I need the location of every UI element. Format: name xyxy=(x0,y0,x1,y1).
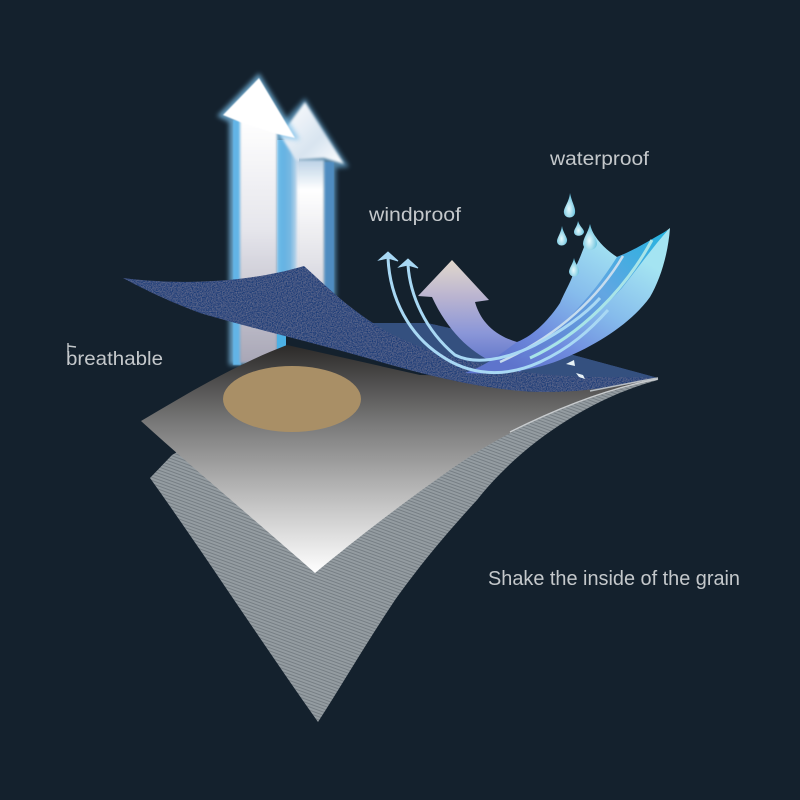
icon: waterproof splash swoosh xyxy=(465,227,670,374)
icon: water drops xyxy=(557,193,597,276)
icon: breathable upward arrows xyxy=(217,73,349,365)
layer: blue outer fabric xyxy=(123,266,658,392)
icon: droplets on blue fabric xyxy=(566,360,585,379)
pale stripes xyxy=(500,256,623,362)
front arrow xyxy=(217,73,300,365)
icon: big windproof arrow xyxy=(418,260,540,372)
tan circle xyxy=(223,366,361,432)
label: waterproof: waterproof xyxy=(549,149,650,170)
swoosh band xyxy=(520,230,668,358)
label: breathable: breathable xyxy=(66,348,163,370)
curled sheet edge xyxy=(510,379,658,432)
label: windproof: windproof xyxy=(368,204,462,226)
lighter far side of blue fabric xyxy=(373,323,658,378)
layer: bottom woven mesh xyxy=(150,380,658,722)
back arrow xyxy=(277,98,349,300)
label: inner grain: Shake the inside of the grain xyxy=(488,568,740,590)
icon: thin wind arrows xyxy=(379,252,608,373)
layer: grey membrane with tan circle xyxy=(141,345,658,573)
highlight strip at the fabric tip xyxy=(590,378,658,391)
